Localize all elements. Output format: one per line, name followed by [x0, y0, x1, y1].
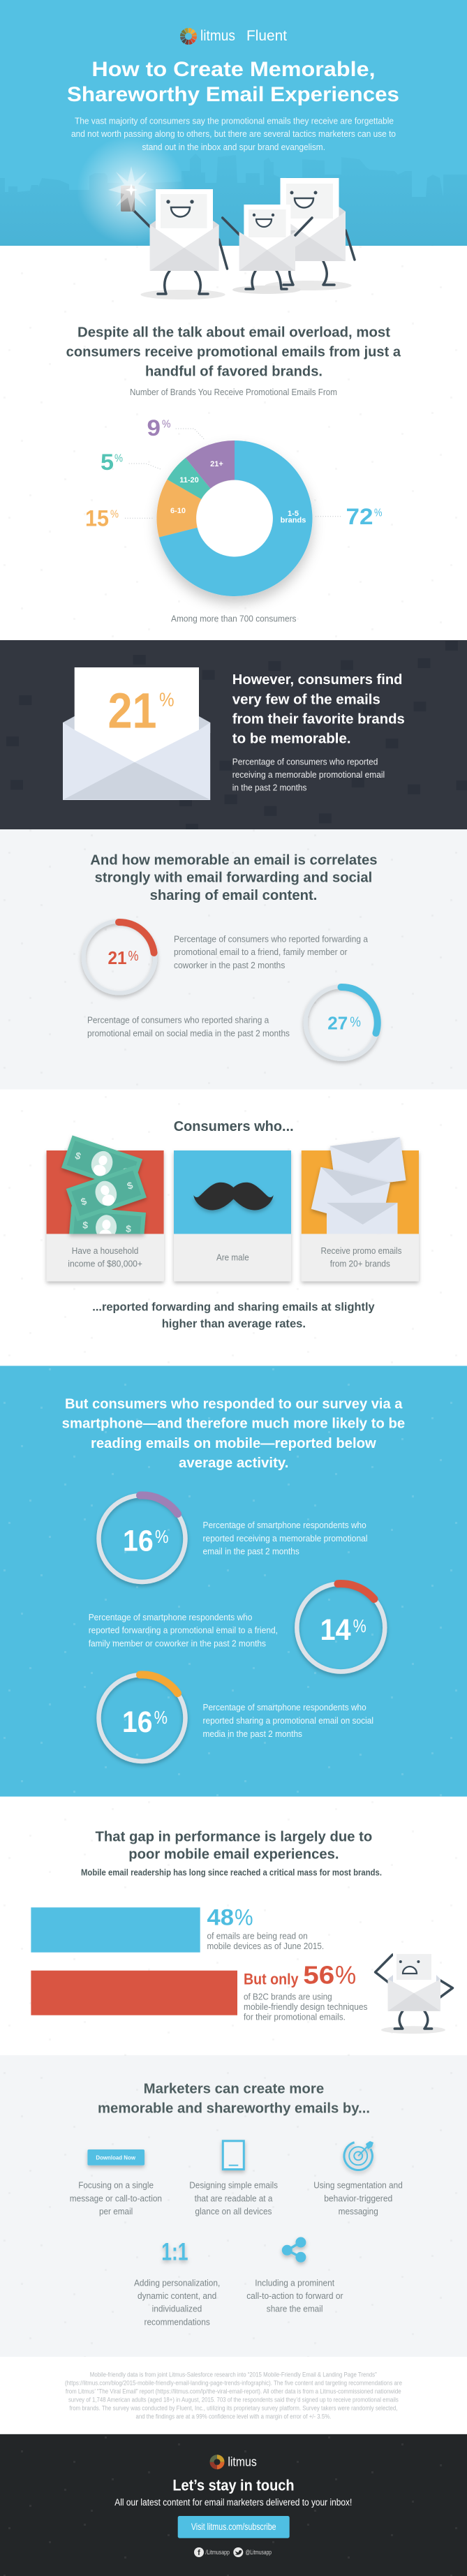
panel: sources footnote: (https://litmus.com/blog/2015-mobile-friendly-email-landing-page-trends-infographic). The five content and targeting recommendations are — [65, 2380, 402, 2388]
tactic: simple design — [189, 2141, 278, 2216]
illustration: open envelope with 21 percent letter: 21 — [108, 684, 156, 739]
segment labels: 6-10 — [170, 507, 186, 515]
stat: 48 percent: % — [235, 1904, 253, 1930]
text: shared: promotional email on social media in the past 2 months — [87, 1029, 290, 1039]
icon: target — [339, 2137, 378, 2175]
subheading: All our latest content for email marketers delivered to your inbox! — [114, 2497, 352, 2508]
panel: sources footnote: from brands. The survey was conducted by Fluent, Inc., utilizing its proprietary survey platform. Survey takers were randomly selected, — [69, 2405, 398, 2413]
caption: message or call-to-action — [70, 2193, 162, 2203]
title: Shareworthy Email Experiences — [67, 83, 399, 106]
text: 56 percent — [244, 1992, 367, 2022]
bar: 56 percent — [31, 1971, 237, 2015]
text: 56 percent: of B2C brands are using — [244, 1992, 332, 2001]
text: 48 percent: of emails are being read on — [207, 1931, 308, 1941]
panel: sources footnote: survey of 1,748 American adults (aged 18+) in August, 2015. 703 of the respondents said they’d signed up to receive promotional emails — [68, 2397, 399, 2404]
tactic: share — [246, 2237, 343, 2314]
panel: smartphone respondents — [0, 1365, 467, 1797]
ring: 27 percent shared: 27 — [327, 1013, 348, 1034]
heading: however — [232, 672, 405, 746]
heading: however: However, consumers find — [232, 672, 402, 688]
stat: 56 percent: But only — [244, 1970, 299, 1987]
text: forwarded: coworker in the past 2 months — [174, 961, 285, 970]
caption: Including a prominent — [255, 2278, 335, 2288]
stat: 9 percent: 9 — [147, 415, 161, 441]
ring: 16 percent sharing: 16 — [122, 1705, 152, 1739]
heading: Marketers can create more — [144, 2081, 324, 2096]
heading: memorable and shareworthy emails by... — [98, 2101, 370, 2116]
stat: 72 percent: % — [374, 507, 383, 519]
icon: dollar bills: $ — [80, 1195, 88, 1208]
caption — [70, 2181, 162, 2216]
icon: stack of envelopes — [311, 1137, 406, 1234]
social: facebook: f — [198, 2549, 200, 2557]
stat: 56 percent — [244, 1961, 356, 1990]
logo: litmus: litmus — [200, 28, 235, 44]
conclusion text: higher than average rates. — [162, 1317, 306, 1330]
text: forwarding — [89, 1613, 278, 1648]
character: sad envelope — [376, 1950, 452, 2034]
stat: 5 percent — [101, 450, 123, 475]
icon: dollar bills: $ — [121, 1165, 129, 1178]
icon: dollar bills: $ — [82, 1219, 89, 1231]
ring: 14 percent forwarding: 14 — [320, 1613, 351, 1647]
icon: share — [282, 2237, 306, 2263]
caption — [68, 1246, 142, 1269]
stat: 72 percent: 72 — [346, 504, 373, 529]
description — [232, 757, 385, 793]
caption: share the email — [267, 2304, 323, 2314]
section heading: overload: Despite all the talk about email overload, most — [77, 325, 390, 341]
panel: footer — [0, 2434, 467, 2576]
text: 56 percent: mobile-friendly design techniques — [244, 2002, 367, 2012]
caption: individualized — [152, 2304, 202, 2314]
segment labels: brands — [281, 517, 306, 525]
caption — [313, 2181, 403, 2216]
card: household income — [47, 1135, 164, 1282]
caption: Have a household — [72, 1246, 138, 1256]
card: 20+ brands — [302, 1137, 419, 1282]
panel: sources footnote: Mobile-friendly data is from joint Litmus-Salesforce research into “2015 Mobile-Friendly Email & Landing Page Trends” — [90, 2371, 377, 2379]
heading: Consumers who... — [174, 1119, 294, 1134]
ring: 14 percent forwarding: % — [353, 1615, 366, 1636]
section heading: overload: handful of favored brands. — [145, 364, 323, 380]
caption — [189, 2181, 278, 2216]
social: twitter — [233, 2547, 272, 2557]
ring: 16 percent memorable — [99, 1495, 186, 1582]
text: forwarded — [174, 934, 368, 970]
ring: 14 percent forwarding — [297, 1583, 385, 1671]
caption: Focusing on a single — [78, 2181, 154, 2191]
heading: smartphone—and therefore much more likely to be — [62, 1416, 405, 1432]
caption: Receive promo emails — [321, 1246, 402, 1256]
intro paragraph: stand out in the inbox and spur brand evangelism. — [142, 142, 325, 152]
ring: 21 percent forwarded — [84, 921, 155, 993]
segment labels: 1-5 — [288, 510, 299, 518]
segment: 1-5 brands — [159, 441, 312, 596]
segment: 11-20 — [167, 458, 210, 499]
stat: 56 percent: 56 — [303, 1961, 334, 1990]
text: sharing — [202, 1703, 373, 1739]
title — [67, 58, 399, 106]
tactic: personalization — [134, 2239, 220, 2327]
panel: sources footnote: from Litmus’ “The Viral Email” report (https://litmus.com/lp/the-viral-email-report). All other data is from a Litmus-commissioned nationwide — [66, 2388, 401, 2396]
segment: 6-10 — [156, 480, 201, 538]
text: shared — [87, 1016, 290, 1039]
caption: Designing simple emails — [189, 2181, 278, 2191]
intro paragraph — [71, 116, 396, 152]
text: forwarding: family member or coworker in the past 2 months — [89, 1638, 266, 1648]
caption: recommendations — [144, 2317, 210, 2327]
card: male — [174, 1150, 291, 1282]
panel: recommendations — [0, 2055, 467, 2357]
panel: consumers who — [42, 1120, 421, 1330]
heading: however: to be memorable. — [232, 730, 351, 746]
caption — [246, 2278, 343, 2314]
illustration: open envelope with 21 percent letter — [63, 667, 210, 800]
heading: And how memorable an email is correlates — [90, 852, 378, 868]
intro paragraph: and not worth passing along to others, but there are several tactics marketers can use to — [71, 129, 396, 139]
heading: sharing of email content. — [150, 888, 317, 903]
text: sharing: Percentage of smartphone respondents who — [202, 1703, 366, 1712]
heading: however: from their favorite brands — [232, 711, 405, 727]
caption — [321, 1246, 402, 1269]
description: in the past 2 months — [232, 783, 306, 793]
stat: 5 percent: % — [114, 453, 123, 465]
button: subscribe — [178, 2516, 290, 2538]
ring: 21 percent forwarded: 21 — [108, 947, 127, 968]
city skyline — [0, 154, 467, 246]
text: shared: Percentage of consumers who reported sharing a — [87, 1016, 269, 1026]
panel: 21 percent memorable — [0, 640, 467, 829]
text: 56 percent: for their promotional emails. — [244, 2013, 346, 2022]
icon: button: Download Now — [96, 2154, 135, 2161]
section heading: overload: consumers receive promotional emails from just a — [66, 345, 401, 360]
conclusion text — [92, 1300, 375, 1330]
stat: 15 percent: % — [110, 509, 119, 521]
text: 48 percent — [207, 1931, 324, 1951]
stat: 9 percent — [147, 415, 170, 441]
logo: Fluent: Fluent — [246, 28, 287, 44]
logo: litmus footer: litmus — [228, 2455, 257, 2469]
illustration: open envelope with 21 percent letter: % — [159, 689, 175, 711]
text: memorable: reported receiving a memorable promotional — [202, 1534, 367, 1544]
caption: Using segmentation and — [313, 2181, 403, 2191]
panel: sources footnote: and the findings are at a 99% confidence level with a margin of error of +/- 3.5%. — [135, 2413, 331, 2421]
button: subscribe: Visit litmus.com/subscribe — [191, 2521, 276, 2532]
heading — [62, 1397, 405, 1471]
subheading: Mobile email readership has long since reached a critical mass for most brands. — [81, 1868, 382, 1878]
segment labels — [170, 460, 306, 525]
character: large envelope at back — [265, 178, 355, 290]
text: forwarded: Percentage of consumers who reported forwarding a — [174, 934, 368, 944]
heading: average activity. — [179, 1456, 288, 1471]
bar: 48 percent — [31, 1907, 200, 1953]
caption: dynamic content, and — [138, 2291, 216, 2301]
icon: dollar bills — [61, 1135, 147, 1247]
stat: 56 percent: % — [335, 1961, 356, 1990]
heading — [95, 1829, 372, 1863]
text: memorable: email in the past 2 months — [202, 1547, 299, 1557]
intro paragraph: The vast majority of consumers say the promotional emails they receive are forgettable — [75, 116, 394, 126]
caption: call-to-action to forward or — [246, 2291, 343, 2301]
caption: messaging — [339, 2207, 378, 2216]
ring: 16 percent sharing: % — [154, 1707, 168, 1728]
stat: 48 percent: 48 — [207, 1904, 234, 1930]
logo: litmus — [180, 28, 235, 45]
stat: 9 percent: % — [162, 419, 170, 431]
ring: 16 percent memorable: % — [155, 1526, 169, 1547]
illustration: three happy envelope characters — [108, 166, 355, 299]
tactic: segmentation — [313, 2137, 403, 2216]
ring: 27 percent shared — [306, 986, 378, 1059]
ring: 16 percent sharing — [99, 1675, 186, 1761]
heading: That gap in performance is largely due to — [95, 1829, 372, 1844]
icon: dollar bills: $ — [125, 1223, 132, 1234]
conclusion text: ...reported forwarding and sharing emails at slightly — [92, 1300, 375, 1314]
caption: behavior-triggered — [324, 2193, 392, 2203]
icon: mustache — [193, 1183, 274, 1211]
caption: that are readable at a — [195, 2193, 272, 2203]
ring: 27 percent shared: % — [350, 1014, 361, 1030]
tactic: single call-to-action — [70, 2149, 162, 2216]
icon: dollar bills: $ — [74, 1150, 82, 1162]
caption: from 20+ brands — [330, 1259, 390, 1269]
panel: sources footnote — [0, 2357, 467, 2434]
chart note: Among more than 700 consumers — [171, 614, 296, 624]
caption: income of $80,000+ — [68, 1259, 142, 1269]
text: forwarding: reported forwarding a promotional email to a friend, — [89, 1626, 278, 1636]
character: small envelope in middle — [223, 205, 312, 294]
caption — [134, 2278, 220, 2327]
caption: per email — [99, 2207, 133, 2216]
text: memorable — [202, 1520, 367, 1557]
social: twitter: @Litmusapp — [246, 2549, 272, 2556]
heading — [98, 2081, 370, 2116]
ring: 21 percent forwarded: % — [128, 949, 139, 964]
glow from phone — [77, 135, 186, 244]
text: forwarding: Percentage of smartphone respondents who — [89, 1613, 252, 1622]
panel: ground — [0, 245, 467, 640]
heading: But consumers who responded to our survey via a — [65, 1397, 403, 1412]
heading: Let’s stay in touch — [172, 2476, 295, 2494]
ring: 16 percent memorable: 16 — [123, 1525, 154, 1558]
chart subtitle: Number of Brands You Receive Promotional Emails From — [130, 387, 337, 397]
text: sharing: reported sharing a promotional email on social — [202, 1716, 373, 1726]
heading — [90, 852, 378, 903]
social: facebook: /Litmusapp — [205, 2549, 230, 2556]
title: How to Create Memorable, — [91, 58, 376, 81]
segment labels: 21+ — [210, 460, 223, 468]
panel: forwarding and sharing — [0, 829, 467, 1089]
text: forwarded: promotional email to a friend, family member or — [174, 947, 348, 957]
text: 48 percent: mobile devices as of June 2015. — [207, 1941, 324, 1951]
icon: dollar bills: $ — [126, 1179, 135, 1192]
heading: strongly with email forwarding and social — [95, 871, 372, 886]
panel: mobile experience gap — [0, 1797, 467, 2055]
heading: however: very few of the emails — [232, 691, 380, 707]
panel: hero — [0, 0, 467, 246]
caption: Adding personalization, — [134, 2278, 220, 2288]
segment: 21+ — [186, 441, 235, 489]
social: facebook — [194, 2547, 230, 2557]
logo: litmus footer — [212, 2455, 257, 2469]
caption: glance on all devices — [195, 2207, 272, 2216]
icon: one to one: 1:1 — [161, 2239, 188, 2266]
segment labels: 11-20 — [179, 476, 199, 484]
donut chart — [156, 441, 312, 596]
description: Percentage of consumers who reported — [232, 757, 378, 767]
donut hole — [196, 480, 273, 556]
stat: 48 percent — [207, 1904, 253, 1930]
stat: 72 percent — [346, 504, 383, 529]
text: sharing: media in the past 2 months — [202, 1729, 302, 1739]
phone with flash — [108, 166, 154, 213]
stat: 15 percent: 15 — [85, 505, 109, 531]
caption: Are male — [216, 1252, 249, 1262]
text: memorable: Percentage of smartphone respondents who — [202, 1520, 366, 1530]
section heading: overload — [66, 325, 401, 380]
heading: poor mobile email experiences. — [128, 1847, 339, 1863]
stat: 5 percent: 5 — [101, 450, 114, 475]
character: front envelope holding phone — [108, 166, 228, 299]
heading: reading emails on mobile—reported below — [91, 1436, 376, 1451]
icon: phone — [223, 2141, 244, 2170]
description: receiving a memorable promotional email — [232, 770, 385, 780]
